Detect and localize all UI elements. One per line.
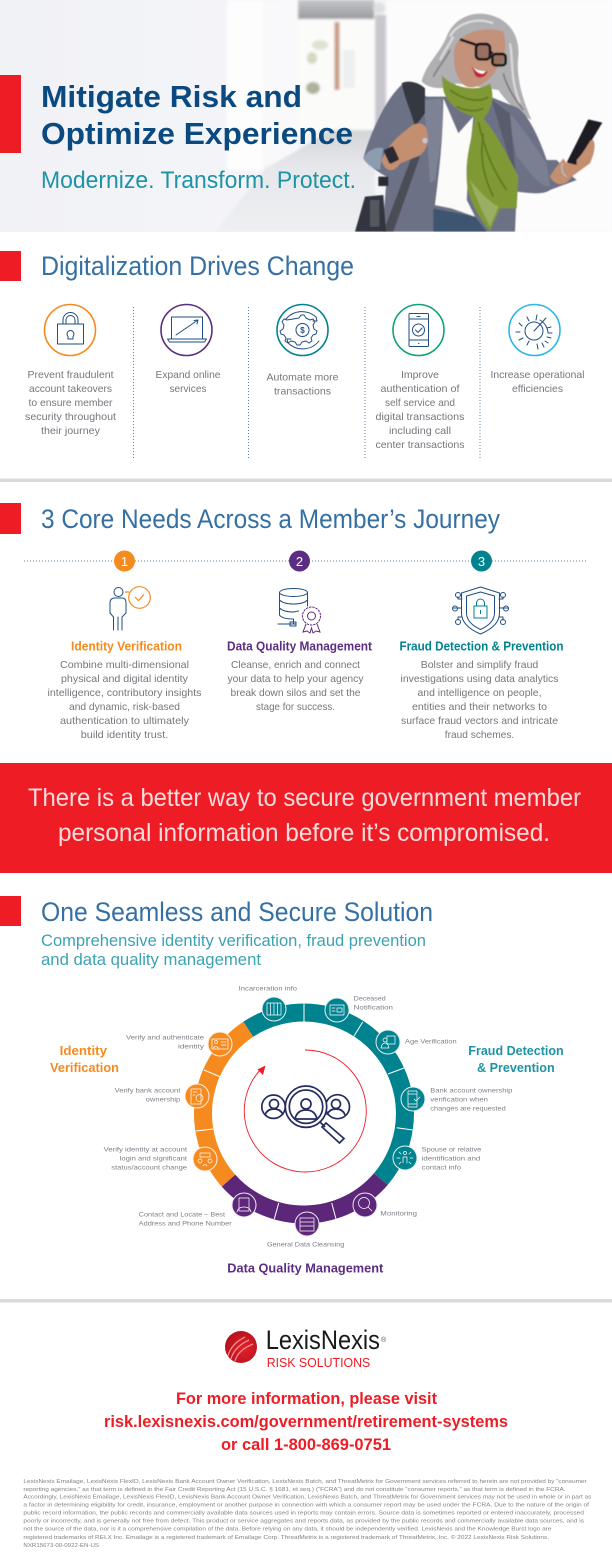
labels: identity verification items: changes are requested xyxy=(430,1106,506,1113)
text: expand online xyxy=(156,369,221,395)
labels: identity verification items: ownership xyxy=(146,1097,181,1104)
left hand xyxy=(382,124,428,170)
text: data quality management xyxy=(227,640,373,713)
text: identity verification: and dynamic, risk-based xyxy=(69,701,180,713)
legal disclaimer: LexisNexis Emailage, LexisNexis FlexID, LexisNexis Bank Account Owner Verification, LexisNexis Batch, and ThreatMetrix for Government services referred to herein are not provided by “consumer xyxy=(23,1479,587,1485)
text: data quality management: break down silos and set the xyxy=(230,687,361,699)
labels: identity verification items: Contact and Locate – Best xyxy=(139,1212,225,1219)
scarf xyxy=(442,75,518,231)
text: prevent takeovers: their journey xyxy=(41,425,101,437)
subheading: and data quality management xyxy=(41,950,261,969)
subheading xyxy=(41,931,426,969)
text: identity verification: build identity trust. xyxy=(81,729,168,741)
panel: 3 core needs xyxy=(0,503,586,741)
icon: shield with lock xyxy=(452,587,508,634)
text: increase efficiencies: Increase operational xyxy=(490,369,584,381)
text: increase efficiencies xyxy=(490,369,584,395)
text: expand online: Expand online xyxy=(156,369,221,381)
labels: identity verification items: identity xyxy=(178,1044,205,1051)
labels: identity verification items: Address and Phone Number xyxy=(139,1221,233,1228)
text: improve authentication: Improve xyxy=(401,369,439,381)
logo: LexisNexis Risk Solutions: LexisNexis xyxy=(266,1325,380,1355)
labels: identity verification items: Deceased xyxy=(354,996,386,1003)
logo: LexisNexis Risk Solutions: RISK SOLUTIONS xyxy=(267,1356,370,1370)
glasses xyxy=(460,39,493,53)
hero red accent bar xyxy=(0,75,21,153)
icon: gear with dollar: $ xyxy=(300,326,305,335)
labels: identity verification items: Verify and authenticate xyxy=(126,1035,204,1042)
straps and bag xyxy=(402,82,425,127)
text: data quality management: your data to help your agency xyxy=(228,673,364,685)
group label: fraud detection and prevention: Fraud Detection xyxy=(468,1043,564,1058)
text: prevent takeovers: account takeovers xyxy=(29,383,112,395)
text: prevent takeovers: Prevent fraudulent xyxy=(28,369,114,381)
logo: LexisNexis Risk Solutions: ® xyxy=(381,1336,387,1344)
ring diagram xyxy=(50,986,564,1276)
text: improve authentication: center transactions xyxy=(376,439,464,451)
text: identity verification xyxy=(48,640,202,741)
labels: identity verification items: Age Verification xyxy=(405,1039,457,1046)
labels: identity verification items: Notification xyxy=(354,1005,393,1012)
icon: authenticate identity xyxy=(208,1032,232,1056)
labels: identity verification items: status/account change xyxy=(111,1165,187,1172)
text: fraud detection: entities and their networks to xyxy=(412,701,547,713)
icon: verify at login xyxy=(193,1147,217,1171)
section marker xyxy=(0,896,21,926)
text: prevent takeovers: security throughout xyxy=(25,411,116,423)
title xyxy=(41,79,353,151)
step 3 number xyxy=(471,550,492,572)
right hand and phone xyxy=(550,138,595,184)
text: improve authentication: including call xyxy=(389,425,451,437)
labels: identity verification items: identification and xyxy=(422,1156,481,1163)
face xyxy=(454,29,505,87)
text: expand online: services xyxy=(170,383,206,395)
call to action: risk.lexisnexis.com/government/retirement-systems xyxy=(104,1412,508,1431)
subheading: Comprehensive identity verification, fraud prevention xyxy=(41,931,426,950)
icon: laptop xyxy=(161,304,212,356)
red banner: personal information before it’s compromised. xyxy=(58,819,550,847)
legal disclaimer: Accordingly, LexisNexis Emailage, LexisNexis FlexID, LexisNexis Bank Account Owner Verification, LexisNexis Batch, and ThreatMetrix for Government services may not be used in whole or in part as xyxy=(23,1495,591,1501)
arrow: red circular xyxy=(244,1050,366,1172)
group label: fraud detection and prevention xyxy=(468,1043,564,1075)
red banner: There is a better way to secure government member xyxy=(28,784,581,812)
text: identity verification: Identity Verification xyxy=(71,640,182,654)
text: improve authentication: digital transactions xyxy=(376,411,464,423)
heading: One Seamless and Secure Solution xyxy=(41,897,433,927)
legal disclaimer: registered trademarks of RELX Inc. Emailage is a registered trademark of Emailage Corp. ThreatMetrix is a registered trademark of ThreatMetrix, Inc. © 2022 LexisNexis Risk Solutions. xyxy=(23,1534,549,1541)
group label: identity verification: Identity xyxy=(60,1043,108,1058)
labels: identity verification items: verification when xyxy=(430,1097,488,1104)
labels: identity verification items: contact info xyxy=(422,1165,461,1172)
icon: spouse relative xyxy=(393,1146,417,1170)
text: fraud detection xyxy=(400,640,564,741)
labels: identity verification items: General Data Cleansing xyxy=(267,1242,345,1249)
labels: identity verification items: Monitoring xyxy=(380,1211,417,1218)
red banner xyxy=(0,763,612,873)
icon: database with certificate xyxy=(278,588,320,633)
text: fraud detection: Bolster and simplify fraud xyxy=(421,659,538,671)
text: identity verification: Combine multi-dimensional xyxy=(60,659,189,671)
icon: incarceration xyxy=(262,997,286,1021)
panel: digitalization drives change xyxy=(0,251,584,460)
text: prevent takeovers xyxy=(25,369,116,437)
text: data quality management: Cleanse, enrich and connect xyxy=(231,659,360,671)
step 2 number: 2 xyxy=(296,554,303,569)
icon: phone with check xyxy=(393,304,444,356)
text: identity verification: physical and digital identity xyxy=(61,673,189,685)
section marker xyxy=(0,251,21,281)
hair xyxy=(422,14,532,120)
step 1 number xyxy=(114,550,135,572)
text: fraud detection: fraud schemes. xyxy=(445,729,514,741)
group label: identity verification xyxy=(50,1043,119,1075)
text: improve authentication xyxy=(376,369,464,451)
icon: person verified xyxy=(110,587,150,630)
labels: identity verification items xyxy=(104,986,513,1249)
group label: fraud detection and prevention: & Prevention xyxy=(477,1060,555,1075)
text: fraud detection: surface fraud vectors and intricate xyxy=(401,715,558,727)
step 1 number: 1 xyxy=(121,554,128,569)
section marker xyxy=(0,503,21,534)
legal disclaimer: a factor in determining eligibility for credit, insurance, employment or another purpose in connection with which a consumer report may be used under the FCRA. Due to the nature of the origin of xyxy=(23,1502,589,1508)
icon: age verification xyxy=(376,1030,400,1054)
jacket xyxy=(363,83,577,232)
legal disclaimer: public record information, the public records and commercially available data sources used in reports may contain errors. Source data is sometimes reported or entered inaccurately, processed xyxy=(23,1510,584,1516)
jeans xyxy=(433,208,487,232)
heading: Digitalization Drives Change xyxy=(41,251,354,281)
text: data quality management: stage for success. xyxy=(256,701,335,713)
call to action: or call 1-800-869-0751 xyxy=(221,1435,391,1454)
text: automate: Automate more xyxy=(266,372,339,384)
icon: contact and locate xyxy=(232,1193,256,1217)
icon: verify bank account xyxy=(185,1084,209,1108)
step 3 number: 3 xyxy=(478,554,485,569)
title: Mitigate Risk and xyxy=(41,79,302,114)
icon: deceased notification xyxy=(325,998,349,1022)
panel: one seamless and secure solution xyxy=(0,896,564,1276)
text: fraud detection: investigations using data analytics xyxy=(400,673,558,685)
legal disclaimer: not the source of the data, nor is it a comprehensive compilation of the data. Before relying on any data, it should be independently verified. LexisNexis and the Knowledge Burst logo are xyxy=(23,1526,552,1532)
legal disclaimer: reporting agencies,” as that term is defined in the Fair Credit Reporting Act (15 U.S.C. § 1681, et seq.) (“FCRA”) and do not constitute “consumer reports,” as that term is defined in the FCRA. xyxy=(23,1487,566,1493)
step 2 number xyxy=(289,550,310,572)
icon: red globe xyxy=(225,1331,257,1363)
icon: gear gauge xyxy=(509,304,560,356)
shirt xyxy=(435,98,475,217)
icon: bank ownership xyxy=(401,1087,425,1111)
group label: identity verification: Verification xyxy=(50,1060,119,1075)
text: identity verification: authentication to ultimately xyxy=(60,715,190,727)
labels: identity verification items: Spouse or relative xyxy=(422,1147,482,1154)
title: Optimize Experience xyxy=(41,116,353,151)
text: improve authentication: self service and xyxy=(385,397,455,409)
group label: data quality management: Data Quality Management xyxy=(227,1261,384,1276)
text: identity verification: intelligence, contributory insights xyxy=(48,687,202,699)
logo: LexisNexis Risk Solutions xyxy=(225,1325,387,1370)
text: fraud detection: and intelligence on people, xyxy=(418,687,542,699)
text: automate: transactions xyxy=(274,386,331,398)
text: data quality management: Data Quality Management xyxy=(227,640,373,654)
icon: data cleansing xyxy=(295,1212,319,1236)
text: automate xyxy=(266,372,339,398)
text: increase efficiencies: efficiencies xyxy=(512,383,563,395)
legal disclaimer: poorly or incorrectly, and is generally not free from defect. This product or service aggregates and reports data, as provided by the public records and commercially available data sources, and is xyxy=(23,1518,584,1524)
text: prevent takeovers: to ensure member xyxy=(28,397,113,409)
icon: monitoring xyxy=(353,1193,377,1217)
labels: identity verification items: login and significant xyxy=(120,1156,187,1163)
text: fraud detection: Fraud Detection & Prevention xyxy=(400,640,564,654)
labels: identity verification items: Verify identity at account xyxy=(104,1147,187,1154)
hero photo: woman with phone in white corridor xyxy=(0,0,612,232)
mouth xyxy=(472,67,487,78)
legal disclaimer: NXR15673-00-0922-EN-US xyxy=(23,1543,99,1549)
labels: identity verification items: Bank account ownership xyxy=(430,1088,513,1095)
icon: magnifier over people xyxy=(262,1086,350,1143)
labels: identity verification items: Verify bank account xyxy=(115,1088,180,1095)
icon: padlock xyxy=(44,304,96,356)
call to action xyxy=(104,1389,508,1454)
icon: gear with dollar xyxy=(277,304,328,356)
legal disclaimer xyxy=(23,1479,591,1549)
heading: 3 Core Needs Across a Member’s Journey xyxy=(41,504,500,534)
text: improve authentication: authentication of xyxy=(380,383,460,395)
subtitle: Modernize. Transform. Protect. xyxy=(41,167,356,194)
call to action: For more information, please visit xyxy=(176,1389,437,1408)
labels: identity verification items: Incarceration info xyxy=(239,986,297,993)
